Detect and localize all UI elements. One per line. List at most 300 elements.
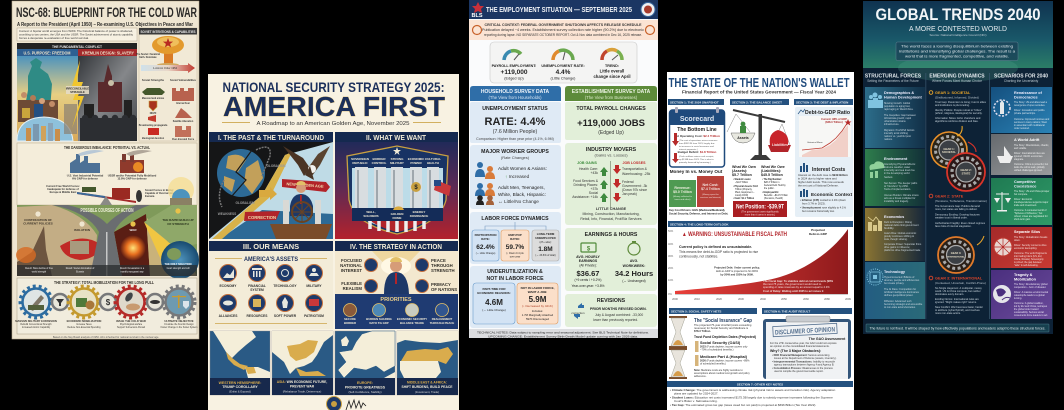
text: what we own: • Student Loans:: [733, 178, 751, 181]
icon: gear 1: GEAR 1:: [943, 147, 955, 151]
panel: earnings and hours: (↔ Unchanged): [622, 279, 646, 283]
text: other key notes: • Climate Change: The government is addressing climate risk (physical risk to assets and transition risk). Agency adaptation: [670, 388, 836, 392]
header: THE EMPLOYMENT SITUATION — SEPTEMBER 2025: [486, 7, 632, 14]
panel: the fundamental conflict: [17, 43, 137, 141]
panel: I. the past and the turnaround: I. THE PAST & THE TURNAROUND: [218, 135, 324, 142]
icon: bars, interest costs: Interest Costs: [812, 167, 846, 173]
icon: lightning: [72, 60, 84, 128]
footer: the future is not fixed: [866, 324, 1049, 332]
box: revenue: [669, 180, 696, 207]
captions: WAGE THE COLD WAR: [116, 319, 146, 323]
card: economics: national debts limit government: [884, 224, 919, 227]
labels and icons: four pillars: [340, 258, 457, 292]
text: what we owe: (Pensions, Health): [764, 197, 783, 200]
text: what we owe: (Liabilities):: [761, 169, 781, 173]
column: establishment survey data: ESTABLISHMENT SURVEY DATA: [572, 89, 651, 95]
arrow: orange arrow 1: [956, 126, 962, 136]
card: environment: in the developing world: [884, 172, 910, 175]
section: gear 1 societal: Identity Politics: People retreat to "tribes": [935, 108, 982, 112]
card: technology: becoming strategic and accessible: [884, 303, 923, 306]
panel: labor force dynamics: EMP-POP: [508, 233, 522, 237]
panel: underutilization: Includes:: [532, 309, 543, 313]
panel: gauges: TREND:: [605, 64, 619, 68]
panel: unemployment status: RATE: 4.4%: [485, 116, 546, 128]
text: social insurance gap: $78.3 Trillion.: [694, 329, 711, 333]
icon: shield with pillars: HEALTH: [427, 161, 439, 165]
panel: debt and inflation: in 2024 due to higher rates and: [798, 176, 837, 180]
section: gear 1 societal: (ethnic, religious, ideological) for security.: [935, 111, 983, 115]
card: environment: Extreme weather, water: [884, 166, 910, 169]
card: demographics: nations vs. youthful poor: [884, 135, 911, 138]
section: gear 1 societal: Trust Gap: Pessimism is rising; trust in elites: [935, 100, 987, 104]
section 4 header: [668, 221, 853, 227]
text: social insurance gap: Trust Fund Depletion Dates (Projected): [694, 335, 757, 339]
panel: industry movers: +37k: [591, 187, 598, 191]
panel: scorecard: The Bottom Line: [677, 127, 717, 133]
panel: gauges: [490, 42, 637, 83]
irreconcilable struggle label: STRUGGLE: [70, 90, 85, 94]
panel: labor force dynamics: over year: [510, 256, 520, 258]
chart: unsustainable fiscal path: 2000: [672, 297, 678, 301]
text: social insurance gap: 2033 (Funds deplete; income covers only: [700, 344, 748, 348]
card: a world adrift: Outcome: China is powerful, but: [1014, 163, 1048, 166]
panel: the dangerous imbalance: Europe & Middle East: [50, 190, 76, 194]
panel: scorecard: up $138B from 2023. This is what is: [679, 158, 715, 161]
panel: scorecard: interest payments.): [679, 148, 698, 151]
road: [52, 205, 150, 276]
map: Middle East and Africa: MIDDLE EAST & AFRICA:: [407, 380, 447, 384]
panel: earnings and hours: 34.2 Hours: [615, 269, 653, 278]
section headers row: SECTION 1: THE 2024 SNAPSHOT: [670, 100, 719, 104]
note: key cost drivers: [669, 208, 728, 216]
section: gear 3 international: (Contested, Uncertain, Conflict-Prone): [935, 281, 986, 285]
panel: underutilization: 1.7M Marginally Attached: [522, 313, 554, 317]
icon: shield with pillars: CULTURAL: [425, 157, 441, 161]
panel: labor force dynamics: (↔ 23.6% of total): [535, 254, 556, 257]
panel: scorecard: [670, 107, 724, 167]
chart: unsustainable fiscal path: 2050: [781, 297, 787, 301]
section: gear 2 state: Democracy Eroding: Growing fractures: [935, 212, 980, 216]
column: establishment survey data: [565, 86, 657, 327]
note: key cost drivers: Social Security, Defense, and Interest on Debt.: [669, 212, 728, 216]
map: western hemisphere: [210, 331, 270, 395]
panel: debt and inflation: • Unemployment rose slightly to 4.1%: [800, 206, 847, 210]
panel: NSC-68 blueprint for the Cold War: [12, 1, 199, 339]
icon: US factory: [70, 150, 104, 173]
panel: The Employment Situation: [469, 0, 658, 338]
signature: [346, 400, 366, 410]
panel: the dangerous imbalance: Soviet Forces in Being:: [145, 188, 174, 192]
panel: scorecard: Scorecard: [680, 116, 714, 123]
subtitle: NSC-68: A Report to the President (April 1950) – Re-examining U.S. Objectives in Peace and War: [17, 22, 194, 28]
captions: Support Subversion Abroad: [117, 326, 146, 329]
chart: unsustainable fiscal path: 10%: [668, 278, 674, 282]
panel: priorities: PRIORITIES: [380, 297, 412, 303]
chart: unsustainable fiscal path: debt-to-GDP is projected to hit 200%: [716, 269, 759, 273]
box: revenue: (Money collected in: [673, 195, 693, 198]
panel: possible courses of action: world strength: [32, 270, 47, 274]
panel: the fundamental conflict: KREMLIN DESIGN: SLAVERY: [82, 50, 134, 56]
card: a world adrift: stagnate.: [1014, 158, 1024, 161]
column: Soviet strengths: NKVD: [150, 113, 157, 115]
column: household survey data: [470, 86, 561, 328]
option B: isolation: [60, 221, 100, 260]
panel: scorecard: to increases in social insurance and: [679, 145, 714, 148]
text: social insurance gap: The projected 75-year shortfall (costs exceeding: [694, 323, 752, 327]
labels and icons: four pillars: FLEXIBLE: [341, 281, 362, 286]
section: gear 1 societal: algorithms reinforce division and bias.: [935, 119, 979, 123]
card: economics: Asia's Rise: Global economic: [884, 232, 917, 235]
column: Soviet strengths: Soviet Strengths: [142, 78, 165, 82]
icon: shield with pillars: SOLDIERS: [363, 214, 379, 218]
panel: earnings and hours: (+9 cents / +0.2%): [575, 278, 601, 282]
section: gear 3 international: more non-state actors.: [935, 311, 961, 315]
map: Europe: EUROPE:: [357, 381, 373, 385]
icon: shield with pillars: WALL,: [366, 210, 376, 214]
card: technology: Hyperconnected: Billions of: [884, 276, 915, 279]
panel: industry movers: Retail, Info, Financial, Prof/Biz Services: [580, 217, 642, 221]
panel: the dangerous imbalance: Current Free World Forces:: [46, 184, 80, 188]
heading: possible courses of action: POSSIBLE COURSES OF ACTION: [80, 208, 134, 214]
card: a world adrift: and volatile.: [1014, 147, 1027, 150]
panel: the fundamental conflict: THE FUNDAMENTAL CONFLICT: [52, 44, 102, 49]
panel: gauges: PAYROLL EMPLOYMENT:: [492, 64, 536, 68]
card: separate silos: [991, 227, 1052, 268]
panel: disclaimer of opinion: Why? (The 3 Major Obstacles):: [770, 349, 821, 353]
captions: Psychological warfare: [120, 323, 143, 326]
text: what we owe: $28.3 Trillion in: [764, 181, 780, 184]
panel: priorities: BORDER: [344, 321, 356, 325]
panel: total payroll changes: +119,000 JOBS: [577, 118, 645, 129]
chart: debt to GDP: Current: 98% of GDP: [821, 117, 847, 121]
irreconcilable struggle label: [66, 86, 89, 94]
labels and icons: four pillars: PRIMACY: [431, 282, 451, 287]
column headers: EMERGING DYNAMICS: [929, 74, 985, 80]
card: separate silos: China, Russia). Sovereignty: [1014, 258, 1044, 261]
section: gear 2 state: GEAR 2: STATE: [935, 194, 964, 198]
card: economics: flexibility.: [884, 227, 894, 230]
panel: possible courses of action: Result: Devastation in a: [120, 267, 145, 270]
subtitle: Wallet: Financial Report of the United States Government — Fiscal Year 2024: [682, 90, 836, 96]
card: renaissance of democracies: Driver: Innovation and public-: [1014, 109, 1045, 112]
panel: III. our means: RESOURCES: [247, 314, 268, 318]
panel: industry movers: Warehousing: -25k: [622, 172, 651, 176]
option A: continuation: CURRENT POLICIES: [23, 222, 53, 226]
panel: possible courses of action: [16, 205, 199, 279]
card: renaissance of democracies: [991, 87, 1052, 133]
panel: major worker groups: White, Black, Hispanic:: [498, 192, 546, 197]
text: what we own: What We Own: [732, 165, 756, 169]
panel: earnings and hours: (All Private):: [579, 264, 597, 268]
captions: Frustrate the Kremlin Design: [164, 323, 194, 326]
arrow: orange arrow 2: [977, 236, 984, 245]
note: key cost drivers: Key Cost Drivers: HHS (Medicare/Medicaid),: [669, 208, 725, 212]
panel: III. our means: [209, 241, 333, 329]
panel: II. what we want: II. WHAT WE WANT: [366, 135, 427, 142]
banner: new golden age: NEW GOLDEN AGE: [286, 181, 324, 189]
card: demographics: intensify amid shifting: [884, 132, 909, 135]
chart: unsustainable fiscal path: 50%: [668, 229, 674, 233]
card: demographics: rapid aging in West/China.: [884, 108, 914, 111]
icon: shield with pillars: $: [414, 185, 418, 191]
card: tragedy and mobilization: Tragedy &: [1014, 273, 1033, 277]
panel: Soviet intentions and capabilities: The Soviet: Fanatical: [136, 53, 160, 56]
card: a world adrift: unified challenges ignored.: [1014, 169, 1043, 172]
panel: the dangerous imbalance: 6% GNP for defense: [72, 176, 98, 180]
context text box: Context: A bipolar world emerges from WWII. The historical balance of power is shattered,: [19, 29, 133, 33]
column: Soviet strengths: Massive land armies: [142, 98, 165, 100]
section: gear 1 societal: and institutions is plummeting.: [935, 103, 970, 107]
box: net cost: $7.4 Trillion: [701, 187, 720, 191]
icon: gear 2: GEAR 2:: [960, 168, 972, 172]
column: household survey data: HOUSEHOLD SURVEY DATA: [481, 89, 550, 95]
panel: industry movers: Assistance: +14k: [572, 195, 598, 199]
text: what we owe: • The Big Number:: [762, 179, 782, 181]
map: Middle East and Africa: SHIFT BURDENS, BUILD PEACE: [402, 385, 453, 389]
callout: thesis: world that is more fragmented, competitive, and volatile.: [905, 54, 1009, 58]
icon: gear 3: [938, 237, 974, 273]
column headers: Where Forces Meet Human Choice: [932, 79, 982, 83]
option D: rapid build-up: OF STRENGTH: [167, 222, 189, 226]
text: social insurance gap: revenues) for Social Security and Medicare is: [694, 326, 749, 330]
panel: major worker groups: (Rate Changes): [501, 155, 530, 160]
panel: underutilization: 597K Discouraged: [526, 317, 549, 321]
card: renaissance of democracies: Outcome: Improved incomes and: [1014, 118, 1050, 121]
gear: cold war: [115, 286, 147, 318]
text: what we own: • Physical Assets: $1.8: [733, 185, 758, 188]
text: other key notes: • Tax Gap: The estimated gross tax gap (taxes owed but not paid) is projected at $696 Billion (Tax Year 2022).: [670, 403, 816, 407]
title: Global Trends: GLOBAL TRENDS 2040: [876, 5, 1040, 24]
text: other key notes: plans are updated for 2024-2027.: [674, 392, 719, 396]
map: Europe: PROMOTE GREATNESS: [345, 386, 386, 390]
card: competitive coexistence: Outcome: A contested world of: [1014, 209, 1047, 212]
panel: possible courses of action: Goal: strength and will: [167, 267, 190, 270]
box: revenue: Revenue:: [674, 186, 691, 190]
card: separate silos: is prized; the gap between: [1014, 261, 1043, 264]
panel: industry movers: (Down 97k since: [622, 188, 647, 192]
crowd of people: [18, 92, 58, 122]
option D: rapid build-up: [144, 205, 199, 279]
panel: labor force dynamics: (↔ Little Change): [476, 252, 495, 255]
card: technology: but create privacy.: [884, 282, 905, 285]
card: competitive coexistence: short-term gain.: [1014, 218, 1031, 221]
card: renaissance of democracies: Democracies: [1014, 96, 1038, 100]
callout: thesis: institutions and intensifying global challenges. The result is a: [899, 48, 1016, 54]
map: western hemisphere: WESTERN HEMISPHERE:: [219, 381, 261, 385]
labels and icons: four pillars: PEACE: [431, 258, 446, 263]
chart: unsustainable fiscal path: 2060: [803, 297, 809, 301]
heading: money in vs money out: Money In vs. Money Out: [670, 169, 723, 174]
panel: revisions: lower than previously reported.: [593, 318, 638, 322]
callout: thesis: [896, 42, 1018, 60]
captions: MASSIVE MILITARY EXPANSION: [15, 319, 57, 323]
panel: disclaimer of opinion: agency transactions between Agency A and Agency B.: [774, 364, 834, 366]
panel: industry movers: (Gains vs. Losses): [594, 152, 628, 158]
card: a world adrift: lacks the will to lead; globally: [1014, 166, 1046, 169]
panel: gauges: (Little Change): [551, 76, 576, 80]
card: environment: Net Zeroes: The deeper paths: [884, 182, 918, 185]
map: Middle East and Africa: (Investment, Trade): [415, 390, 439, 394]
chart: unsustainable fiscal path: by 2049 and 535% by 2099.: [720, 272, 754, 276]
panel: III. our means: TECHNOLOGY: [273, 284, 297, 288]
card: a world adrift: A World Adrift: [1014, 138, 1040, 142]
column: Soviet vulnerabilities: [170, 78, 196, 141]
panel: priorities: THROUGH PEACE: [430, 321, 454, 325]
card: tragedy and mobilization: the global order toward: [1014, 308, 1039, 311]
text: what we owe: the public.: [764, 187, 775, 190]
section: gear 3 international: world. US & China compete, but neither: [935, 289, 981, 293]
icon: bars, economic context: Economic Context: [811, 192, 853, 197]
card: separate silos: "safe" is self-defeating.: [1014, 264, 1039, 267]
title: National Security Strategy: NATIONAL SECURITY STRATEGY 2025:: [222, 79, 444, 95]
map: Asia: (Rebalance Trade, Deterrence): [283, 390, 321, 394]
panel: industry movers: [565, 143, 657, 225]
panel: the dangerous imbalance: [17, 143, 197, 205]
chart: unsustainable fiscal path: Debt-to-GDP: [809, 232, 827, 236]
callout: shutdown band: reporting during lapse. NO SEPARATE OCTOBER REPORT. Oct & Nov data combined in Dec 16, 2025 release.: [484, 33, 642, 37]
chart: unsustainable fiscal path: Projected: [811, 228, 825, 232]
column: Soviet strengths: Ideological devotion: [142, 137, 165, 140]
panel: underutilization: PART-TIME FOR: [482, 287, 506, 291]
text: social insurance gap: 2036 (Funds deplete; income covers ~89%: [700, 358, 750, 362]
card: renaissance of democracies: order restored.: [1014, 127, 1030, 130]
panel: priorities: BURDEN SHARING: [366, 317, 392, 321]
panel: III. our means: MILITARY: [306, 284, 322, 288]
chart: unsustainable fiscal path: Cost of Delay: Waiting until 2035 to act raises it: [763, 289, 823, 293]
panel: the dangerous imbalance: Inadequate for defense of: [47, 187, 79, 191]
card: environment: to "Net Zero" by 2050.: [884, 185, 909, 188]
panel: industry movers: Food Services &: [573, 179, 599, 183]
panel: revisions: [565, 294, 657, 327]
card: economics: Asia, though slowing.: [884, 238, 908, 241]
icon: leader figure: [384, 257, 409, 294]
icon: shield with pillars: REPUBLIC: [352, 161, 368, 165]
panel: underutilization: 4.6M: [485, 298, 503, 307]
panel: debt and inflation: the net cost of National Defense.: [798, 184, 839, 188]
section headers row: SECTION 2: THE BALANCE SHEET: [732, 100, 782, 104]
card: separate silos: economic decoupling.: [1014, 247, 1037, 250]
panel: industry movers: +43k: [591, 171, 598, 175]
captions: ECONOMIC MOBILIZATION: [67, 319, 101, 323]
panel: debt and inflation: higher debt levels. This now exceeds: [798, 180, 844, 184]
panel: labor force dynamics: 62.4%: [476, 244, 495, 251]
panel: earnings and hours: $36.67: [577, 269, 599, 278]
footer: the future is not fixed: The future is not fixed. It will be shaped by how effectively populations and leaders adapt to these structural forces.: [870, 326, 1046, 330]
panel: major worker groups: ↔ Little/No Change: [498, 199, 539, 204]
card: demographics: population is aging fast,: [884, 105, 911, 108]
icon: gear 2: [947, 153, 985, 191]
card: demographics: Human Development: [884, 96, 923, 100]
panel: I. the past and the turnaround: GLOBALISM: [235, 201, 255, 205]
icon: shield with pillars: ENERGY: [413, 210, 425, 214]
card: demographics: Slowing Growth: Global: [884, 102, 911, 105]
column: Soviet strengths: [139, 78, 168, 140]
text: what we own: Trillion (Property,: [735, 188, 753, 191]
panel: unemployment status: Comparison: Higher than year prior (4.1%, 6.9M): [476, 137, 554, 141]
panel: labor force dynamics: LONG-TERM: [537, 232, 555, 236]
panel: IV. the strategy in action: IV. THE STRATEGY IN ACTION: [350, 244, 442, 251]
soldiers: [80, 115, 137, 141]
subtitle: contested world: A MORE CONTESTED WORLD: [909, 26, 1007, 33]
section: gear 2 state: Authoritarian Fragility: Even closed regimes: [935, 221, 986, 225]
column headers: STRUCTURAL FORCES: [865, 74, 922, 80]
panel: earnings and hours: Year-over-year: +3.8%: [572, 284, 605, 288]
panel: underutilization: NOT IN LABOR FORCE: [486, 276, 544, 282]
card: environment: [865, 149, 925, 206]
chart: unsustainable fiscal path: 30%: [668, 254, 674, 258]
card: a world adrift: The Story: Directionless, chaotic,: [1014, 144, 1049, 147]
section: gear 3 international: GEAR 3: INTERNATIONAL: [935, 276, 983, 280]
text: social insurance gap: assumptions about medical cost growth and policy: [694, 372, 750, 375]
option C: war: [114, 214, 150, 276]
icon: Kremlin tower: [98, 64, 122, 112]
text: what we own: Plant, Equipment –: [735, 191, 755, 194]
column: Soviet vulnerabilities: Internal Fear: [176, 102, 190, 105]
card: competitive coexistence: The Story: US and China prosper: [1014, 190, 1050, 193]
icon: shield with pillars: GOLDEN: [391, 212, 403, 216]
text: what we owe: $45.5 Trillion: [761, 173, 783, 177]
panel: scorecard: (Cash outflows minus cash receipts,: [679, 155, 714, 158]
icon: ship and wheel: [270, 200, 332, 239]
panel: scorecard: primarily financed by borrowing.): [679, 161, 711, 164]
text: social insurance gap: Medicare Part A (Hospital): [700, 355, 748, 359]
panel: the dangerous imbalance: USSR and/or Potential Fully Mobilized: [108, 174, 157, 178]
card: tragedy and mobilization: led by EU and China, reshapes: [1014, 305, 1048, 308]
icon: hourglasses: [669, 317, 687, 378]
banner: correction: CORRECTION: [248, 215, 276, 220]
text: other key notes: • Student Loans: Education net costs increased $175.3B largely due to subsidy expense increases following the Supreme: [670, 396, 833, 400]
footer: technical notes: TECHNICAL NOTES: Data subject to sampling error and seasonal adjustment. See BLS Technical Note for definitions.: [477, 330, 649, 334]
title: America First: AMERICA FIRST: [223, 91, 445, 122]
panel: industry movers: Transportation &: [622, 167, 648, 171]
section 5 and 6 headers: SECTION 6: THE AUDIT RESULT: [764, 310, 810, 314]
text: social insurance gap: of scheduled benefits.): [700, 362, 726, 366]
icon: shield with pillars: POWER: [410, 161, 422, 165]
panel: the strategy total mobilization: THE STRATEGY: TOTAL MOBILIZATION FOR THE LONG PULL: [54, 280, 154, 285]
panel: disclaimer of opinion: an opinion on the consolidated financial statements.: [770, 344, 830, 348]
panel: labor force dynamics: UNEMPLOYED: [535, 236, 556, 240]
panel: industry movers: Federal: [622, 180, 634, 184]
panel: earnings and hours: WORKWEEK:: [623, 264, 645, 268]
card: environment: acts as a threat multiplier for: [884, 197, 916, 200]
card: separate silos: The Story: Globalization breaks: [1014, 236, 1048, 239]
text: what we owe: Benefits: ~$14.5 Trillion: [764, 194, 789, 197]
panel: Soviet intentions and capabilities: SOVIET INTENTIONS & CAPABILITIES: [140, 30, 196, 34]
card: separate silos: Separate Silos: [1014, 230, 1040, 234]
card: separate silos: down.: [1014, 239, 1021, 242]
context text box: crumbling to two centers, the USA and the USSR. The Soviet achievement of atomic capability: [19, 32, 133, 36]
panel: industry movers: LITTLE CHANGE: [596, 207, 627, 211]
labels and icons: four pillars: FOCUSED: [341, 258, 362, 263]
chart: unsustainable fiscal path: 20%: [668, 266, 674, 270]
card: competitive coexistence: Coexistence: [1014, 184, 1036, 188]
text: what we owe: Federal Debt Held by: [764, 184, 787, 187]
panel: major worker groups: Adult Women & Asians:: [498, 166, 547, 171]
section: gear 2 state: weaken trust in liberal order.: [935, 216, 968, 220]
panel: priorities: NATO 5% GDP: [369, 321, 389, 325]
panel: debt and inflation: but remains historically low.: [802, 209, 835, 213]
chart: unsustainable fiscal path: 2040: [760, 297, 766, 301]
card: competitive coexistence: trade and investment.: [1014, 204, 1037, 207]
card: renaissance of democracies: services in many nations; West: [1014, 121, 1047, 124]
panel: underutilization: (↔ Little Change): [482, 308, 506, 312]
gear: connector 2: [100, 294, 116, 310]
panel: earnings and hours: [565, 228, 657, 291]
gear: military: [20, 286, 52, 318]
footnote NSC-68: Based on the Nay Board analysis of 1950. All is inherited for national survival in the nuclear age.: [53, 336, 159, 339]
chart: unsustainable fiscal path: The Fiscal Gap: To stabilize debt at current levels (98%: [763, 279, 834, 283]
panel: labor force dynamics: PARTICIPATION: [475, 233, 496, 237]
